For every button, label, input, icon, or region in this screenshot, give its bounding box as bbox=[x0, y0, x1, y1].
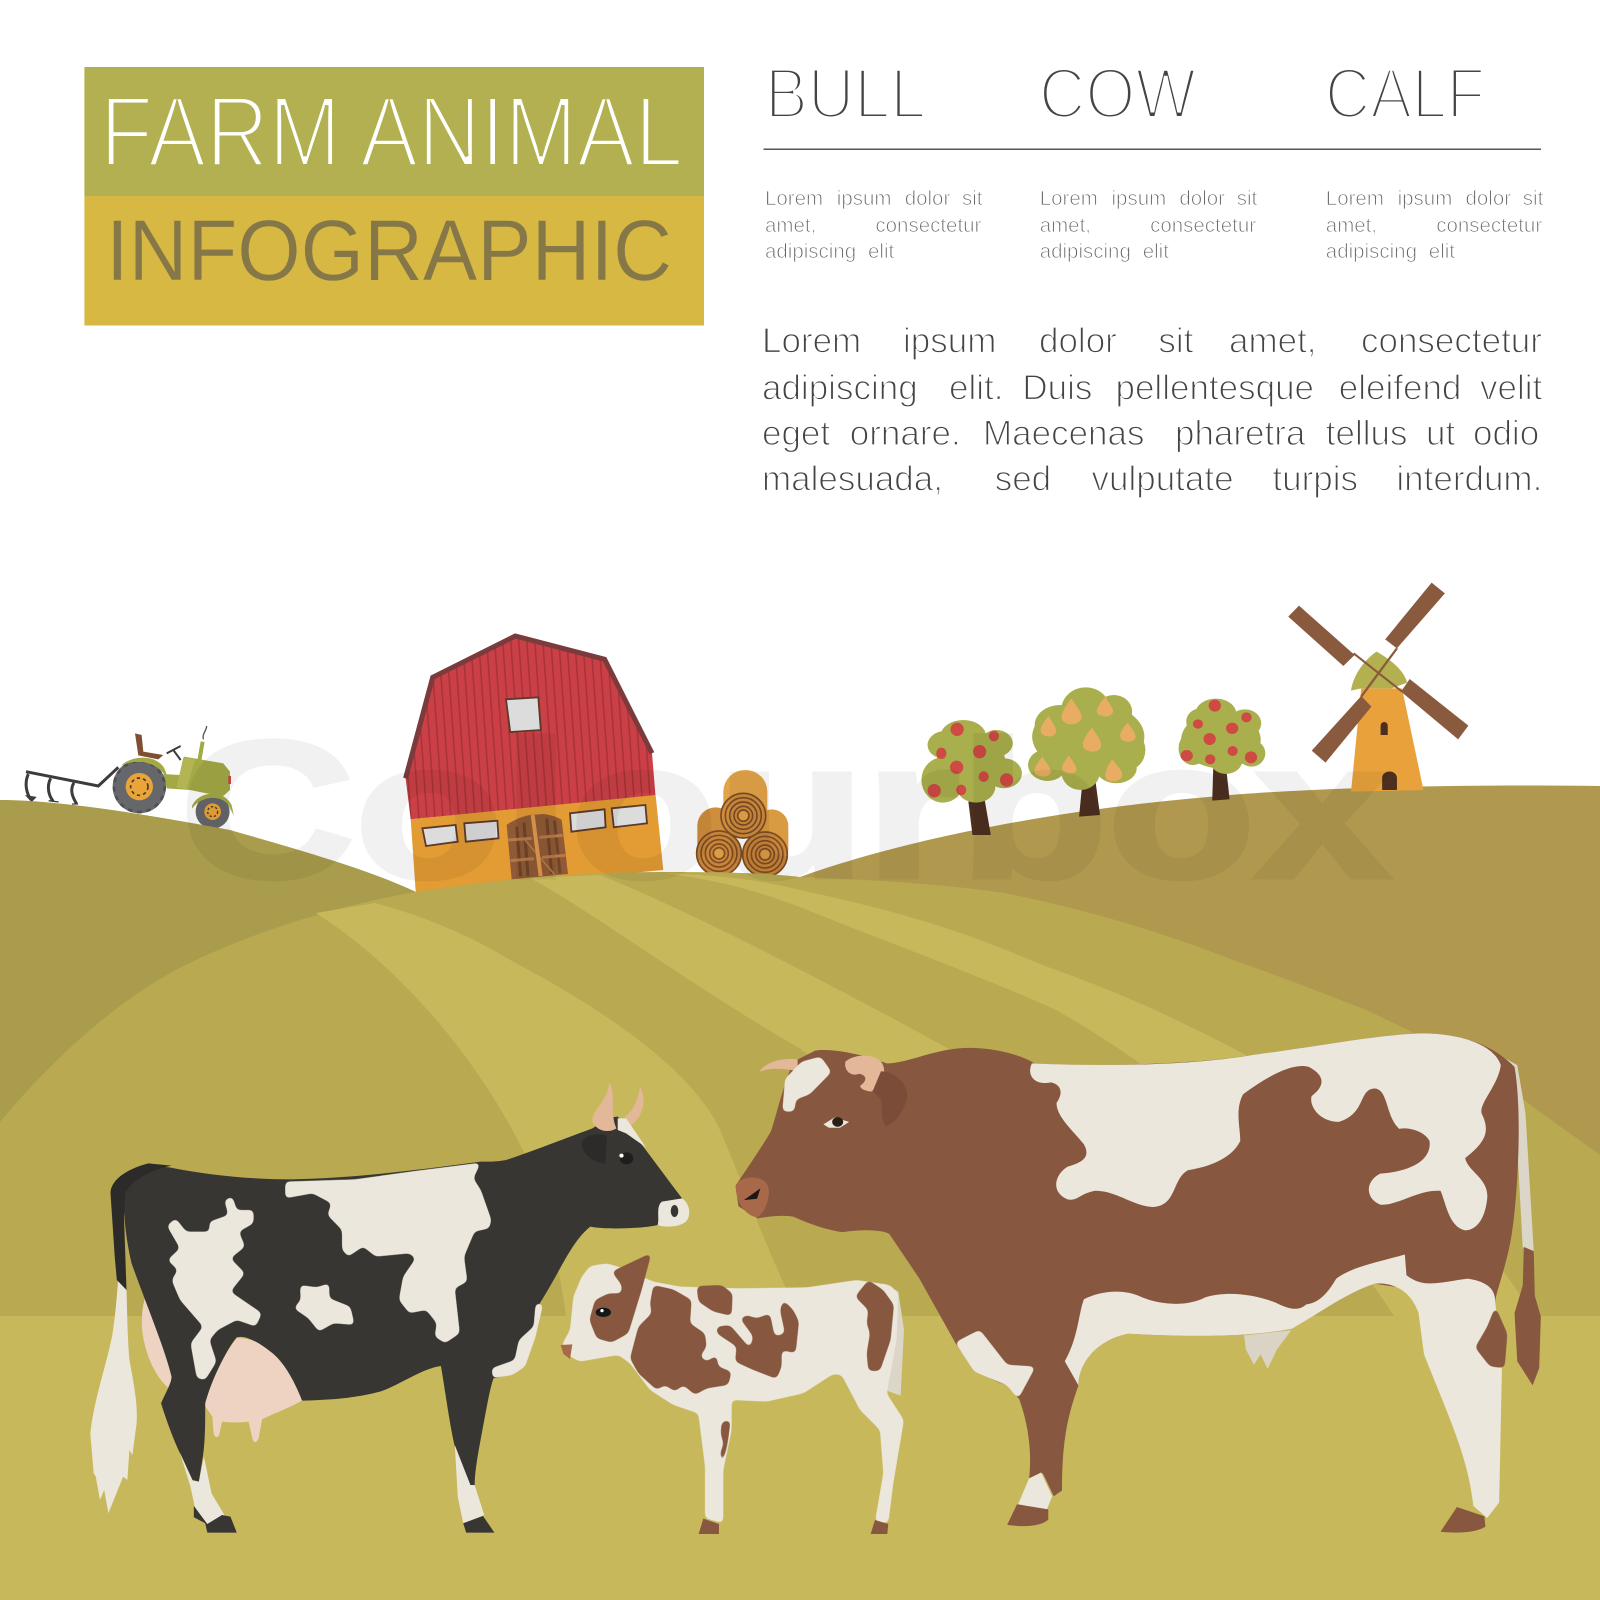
hind hoof bbox=[194, 1506, 237, 1533]
cow eye bbox=[619, 1152, 633, 1164]
mound base bbox=[0, 872, 1600, 1400]
rear udder bbox=[142, 1293, 186, 1390]
cow description text: dolor bbox=[1179, 187, 1225, 210]
bull description text: ipsum bbox=[837, 187, 891, 210]
field stripe one bbox=[316, 903, 800, 1316]
back patch bbox=[1030, 1033, 1501, 1230]
front hoof bbox=[463, 1516, 494, 1533]
smoke bbox=[203, 726, 207, 739]
sheath bbox=[1244, 1330, 1291, 1369]
calf description text: sit bbox=[1523, 187, 1544, 210]
cow description text: consectetur bbox=[1150, 214, 1256, 237]
main paragraph: velit bbox=[1480, 368, 1543, 407]
rear wheel bbox=[113, 760, 166, 813]
barn door bbox=[507, 814, 568, 879]
calf bbox=[561, 1253, 904, 1534]
calf eye bbox=[596, 1308, 611, 1317]
tractor with plough bbox=[26, 726, 234, 829]
hills bbox=[700, 785, 1600, 1400]
right hill bbox=[700, 785, 1600, 1400]
heading: bull: BULL bbox=[765, 55, 926, 134]
rear patch bbox=[167, 1197, 262, 1380]
front hoof bbox=[1007, 1504, 1048, 1526]
cow description text: elit bbox=[1143, 240, 1169, 263]
field mound with stripes bbox=[0, 872, 1600, 1400]
calf description text: Lorem bbox=[1326, 187, 1384, 210]
main paragraph: pellentesque bbox=[1116, 368, 1314, 407]
back patch bbox=[697, 1285, 733, 1316]
rear hoof bbox=[1440, 1507, 1485, 1533]
cow description text: adipiscing bbox=[1040, 240, 1131, 263]
ear bbox=[582, 1134, 607, 1164]
front sock bbox=[455, 1445, 484, 1523]
field stripe three bbox=[663, 873, 1534, 1316]
main paragraph: consectetur bbox=[1361, 322, 1542, 361]
cow description text: amet, bbox=[1040, 214, 1091, 237]
muzzle bbox=[736, 1178, 769, 1217]
main paragraph: Duis bbox=[1022, 368, 1092, 407]
title block bbox=[84, 67, 704, 326]
horn right bbox=[845, 1056, 884, 1092]
heading: cow: COW bbox=[1039, 55, 1196, 134]
hind sock bbox=[180, 1453, 225, 1525]
bull eye bbox=[823, 1117, 849, 1128]
calf brown patches bbox=[589, 1253, 894, 1466]
cap bbox=[1351, 652, 1407, 691]
calf muzzle bbox=[561, 1344, 572, 1359]
orchard trees bbox=[921, 687, 1265, 835]
bull tail tuft bbox=[1515, 1247, 1541, 1385]
calf description text: ipsum bbox=[1398, 187, 1452, 210]
chest patch bbox=[491, 1303, 543, 1378]
chest patch bbox=[955, 1330, 1036, 1399]
hay roll right bbox=[743, 832, 787, 877]
udder bbox=[203, 1338, 302, 1442]
calf description text: consectetur bbox=[1436, 214, 1542, 237]
field stripe two bbox=[530, 875, 1300, 1316]
bull body bbox=[736, 1033, 1519, 1496]
bull description text: elit bbox=[868, 240, 895, 263]
bull description text: Lorem bbox=[765, 187, 823, 210]
title panel: infographic bbox=[84, 196, 704, 326]
rear leg spot bbox=[1475, 1306, 1507, 1368]
column headings bbox=[765, 55, 1485, 134]
horns bbox=[592, 1083, 643, 1131]
belly and rear leg bbox=[1065, 1255, 1502, 1518]
bull description text: sit bbox=[962, 187, 983, 210]
calf description text: elit bbox=[1429, 240, 1455, 263]
calf description text: adipiscing bbox=[1326, 240, 1417, 263]
barn upper wall bbox=[406, 636, 656, 819]
hay bales bbox=[697, 770, 788, 877]
heading: calf: CALF bbox=[1325, 55, 1485, 134]
hay roll left bbox=[697, 831, 741, 876]
apple tree left bbox=[921, 720, 1022, 835]
main paragraph: sed bbox=[995, 460, 1051, 499]
main paragraph: eget bbox=[762, 414, 830, 453]
title panel: farm animal bbox=[84, 67, 704, 196]
heading: infographic: INFOGRAPHIC bbox=[106, 203, 672, 299]
plough bbox=[26, 767, 118, 804]
forehead patch bbox=[782, 1056, 832, 1112]
main paragraph: eleifend bbox=[1339, 368, 1461, 407]
pear tree bbox=[1028, 687, 1145, 817]
cow bbox=[90, 1083, 689, 1533]
calf tail bbox=[883, 1283, 904, 1396]
cow description text: ipsum bbox=[1112, 187, 1166, 210]
rump shading and dark tail bbox=[111, 1163, 172, 1290]
main paragraph: ipsum bbox=[903, 322, 996, 361]
main paragraph: interdum. bbox=[1396, 460, 1542, 499]
tower bbox=[1351, 688, 1423, 792]
windows and door bbox=[1381, 722, 1397, 790]
front wheel bbox=[196, 795, 230, 829]
cow body bbox=[123, 1117, 682, 1487]
watermark: Colourbox bbox=[180, 701, 1390, 919]
cow description text: Lorem bbox=[1040, 187, 1098, 210]
main paragraph: ut bbox=[1426, 414, 1455, 453]
calf description text: dolor bbox=[1466, 187, 1511, 210]
hood highlight bbox=[177, 757, 195, 789]
leg patch bbox=[720, 1420, 731, 1466]
main paragraph: odio bbox=[1473, 414, 1539, 453]
calf body bbox=[562, 1263, 904, 1523]
blades bbox=[1288, 583, 1468, 763]
main paragraph: ornare. bbox=[850, 414, 961, 453]
main paragraph: elit. bbox=[949, 368, 1003, 407]
left hill bbox=[0, 800, 440, 1400]
heading: farm animal: FARM ANIMAL bbox=[100, 76, 683, 188]
bull tail strip bbox=[1495, 1053, 1534, 1251]
seat bbox=[135, 733, 163, 759]
nostril bbox=[744, 1188, 760, 1200]
forehead patch bbox=[618, 1118, 646, 1147]
main paragraph: dolor bbox=[1039, 322, 1117, 361]
main paragraph: amet, bbox=[1229, 322, 1317, 361]
tractor body bbox=[163, 757, 230, 796]
nostril bbox=[671, 1205, 678, 1217]
front sock bbox=[1018, 1473, 1052, 1510]
cream patches bbox=[167, 1163, 543, 1380]
windmill bbox=[1288, 583, 1468, 792]
exhaust pipe bbox=[199, 742, 203, 761]
cow description text: sit bbox=[1237, 187, 1258, 210]
red lamp bbox=[228, 776, 231, 784]
white tail bbox=[90, 1280, 137, 1513]
horn left bbox=[759, 1059, 798, 1072]
bull description text: amet, bbox=[765, 214, 816, 237]
main paragraph: turpis bbox=[1272, 460, 1358, 499]
front fender bbox=[192, 794, 234, 816]
rear fender bbox=[121, 758, 168, 789]
apple tree right bbox=[1179, 699, 1265, 801]
ground bbox=[0, 1316, 1600, 1600]
hay roll top bbox=[721, 793, 766, 838]
barn bbox=[406, 636, 663, 893]
main paragraph: pharetra bbox=[1175, 414, 1306, 453]
bull description text: consectetur bbox=[875, 214, 982, 237]
back bales bbox=[723, 770, 767, 833]
bull description text: adipiscing bbox=[765, 240, 856, 263]
steering wheel bbox=[167, 746, 181, 760]
calf hooves bbox=[699, 1519, 888, 1534]
ear bbox=[873, 1071, 907, 1126]
barn roof trim bbox=[406, 636, 652, 778]
shoulder patch bbox=[285, 1163, 491, 1343]
bull description text: dolor bbox=[905, 187, 950, 210]
rump patch bbox=[855, 1280, 894, 1371]
main paragraph: Maecenas bbox=[983, 414, 1144, 453]
barn windows bbox=[422, 697, 647, 846]
flank patch bbox=[717, 1300, 799, 1379]
barn lower wall bbox=[411, 795, 663, 893]
calf description text: amet, bbox=[1326, 214, 1377, 237]
muzzle bbox=[658, 1198, 689, 1227]
main paragraph: adipiscing bbox=[762, 368, 918, 407]
main paragraph: Lorem bbox=[762, 322, 861, 361]
main paragraph: malesuada, bbox=[762, 460, 943, 499]
main paragraph: sit bbox=[1158, 322, 1194, 361]
shoulder patch bbox=[630, 1285, 732, 1395]
main paragraph: vulputate bbox=[1092, 460, 1234, 499]
main paragraph: tellus bbox=[1326, 414, 1408, 453]
ear and eye patch bbox=[589, 1253, 652, 1343]
bull bbox=[736, 1033, 1541, 1533]
small patch bbox=[294, 1283, 355, 1332]
